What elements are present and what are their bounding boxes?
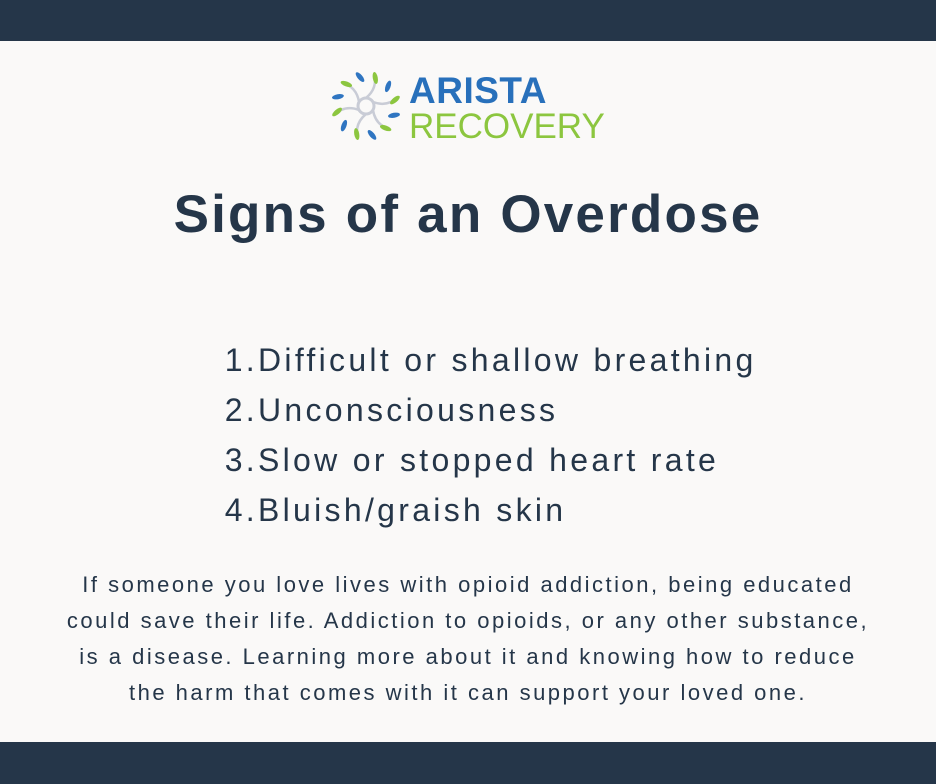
list of signs	[225, 342, 757, 528]
list of signs: Difficult or shallow breathing	[258, 342, 757, 378]
logo	[332, 70, 605, 146]
paragraph: could save their life. Addiction to opioids, or any other substance,	[67, 608, 869, 633]
logo text: ARISTA: ARISTA	[409, 70, 547, 111]
paragraph: the harm that comes with it can support your loved one.	[129, 680, 807, 705]
list of signs: 4.	[225, 492, 258, 528]
list of signs: Slow or stopped heart rate	[258, 442, 719, 478]
icon: leaf wreath	[332, 72, 400, 140]
list of signs: Unconsciousness	[258, 392, 558, 428]
list of signs: 1.	[225, 342, 258, 378]
paragraph: If someone you love lives with opioid addiction, being educated	[82, 572, 854, 597]
title: Signs of an Overdose	[174, 185, 762, 244]
logo text: RECOVERY: RECOVERY	[409, 107, 605, 146]
list of signs: 2.	[225, 392, 258, 428]
top bar	[0, 0, 936, 41]
paragraph: is a disease. Learning more about it and knowing how to reduce	[79, 644, 857, 669]
list of signs: Bluish/graish skin	[258, 492, 566, 528]
bottom bar	[0, 742, 936, 784]
list of signs: 3.	[225, 442, 258, 478]
paragraph	[67, 572, 869, 705]
